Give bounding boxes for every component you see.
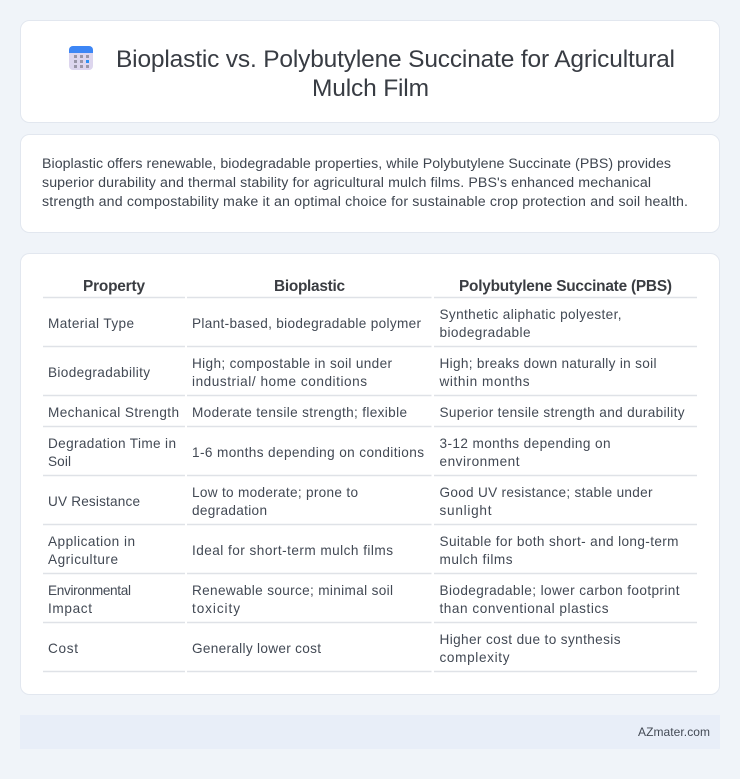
row: biodegradability <box>48 356 656 389</box>
row: degradation time: 1-6 months depending on conditions <box>192 445 424 460</box>
row: degradation time <box>48 436 610 469</box>
row: biodegradability: Biodegradability <box>48 365 150 380</box>
row: biodegradability: High; compostable in soil under <box>192 356 392 371</box>
row: mechanical strength: Mechanical Strength <box>48 405 179 420</box>
row: degradation time: 3-12 months depending on <box>440 436 610 451</box>
table header: Bioplastic <box>274 278 345 295</box>
row: cost: Higher cost due to synthesis <box>440 632 621 647</box>
row: degradation time: Degradation Time in <box>48 436 176 451</box>
row: mechanical strength <box>48 405 685 420</box>
row: application: Ideal for short-term mulch films <box>192 543 393 558</box>
row: uv resistance: Low to moderate; prone to <box>192 485 358 500</box>
table header <box>83 278 672 295</box>
row: application: Application in <box>48 534 135 549</box>
footer <box>20 715 720 749</box>
row: application: Suitable for both short- and long-term <box>440 534 678 549</box>
row: environmental impact: than conventional plastics <box>440 601 609 616</box>
table header: Polybutylene Succinate (PBS) <box>459 278 672 295</box>
row: uv resistance <box>48 485 653 518</box>
panel: comparison table <box>20 254 720 694</box>
row: environmental impact: Impact <box>48 601 92 616</box>
row: uv resistance: UV Resistance <box>48 494 140 509</box>
title: Bioplastic vs. Polybutylene Succinate for Agricultural <box>116 46 675 73</box>
row: biodegradability: High; breaks down naturally in soil <box>440 356 656 371</box>
row: cost: Generally lower cost <box>192 641 321 656</box>
row: cost <box>48 632 621 665</box>
row: biodegradability: industrial/ home conditions <box>192 374 367 389</box>
row: environmental impact: Renewable source; minimal soil <box>192 583 393 598</box>
row: degradation time: Soil <box>48 454 71 469</box>
row: cost: complexity <box>440 650 510 665</box>
row: mechanical strength: Moderate tensile strength; flexible <box>192 405 407 420</box>
row: material type: Plant-based, biodegradable polymer <box>192 316 421 331</box>
row: material type: Synthetic aliphatic polyester, <box>440 307 622 322</box>
summary text: strength and compostability make it an optimal choice for sustainable crop protection and soil health. <box>42 194 688 210</box>
row: environmental impact <box>48 583 680 616</box>
footer: AZmater.com <box>638 725 710 739</box>
row: uv resistance: degradation <box>192 503 267 518</box>
panel: title card <box>20 20 720 122</box>
row: material type: Material Type <box>48 316 134 331</box>
panel: summary <box>20 134 720 232</box>
row: environmental impact: toxicity <box>192 601 240 616</box>
icon: calendar <box>69 46 93 70</box>
row: degradation time: environment <box>440 454 520 469</box>
summary text <box>42 156 688 210</box>
row: uv resistance: Good UV resistance; stable under <box>440 485 653 500</box>
row: biodegradability: within months <box>438 374 530 389</box>
row: uv resistance: sunlight <box>440 503 492 518</box>
row: application <box>48 534 678 567</box>
row: environmental impact: Biodegradable; lower carbon footprint <box>440 583 680 598</box>
row: mechanical strength: Superior tensile strength and durability <box>440 405 685 420</box>
table header: Property <box>83 278 145 295</box>
row: cost: Cost <box>48 641 78 656</box>
row: material type <box>48 307 622 340</box>
title: Mulch Film <box>312 75 429 102</box>
row: environmental impact: Environmental <box>48 583 131 598</box>
row: application: mulch films <box>440 552 513 567</box>
title <box>116 46 675 102</box>
summary text: superior durability and thermal stability for agricultural mulch films. PBS's enhanced mechanical <box>42 175 651 191</box>
summary text: Bioplastic offers renewable, biodegradable properties, while Polybutylene Succinate (PBS) provides <box>42 156 671 172</box>
row: application: Agriculture <box>48 552 118 567</box>
row: material type: biodegradable <box>440 325 530 340</box>
